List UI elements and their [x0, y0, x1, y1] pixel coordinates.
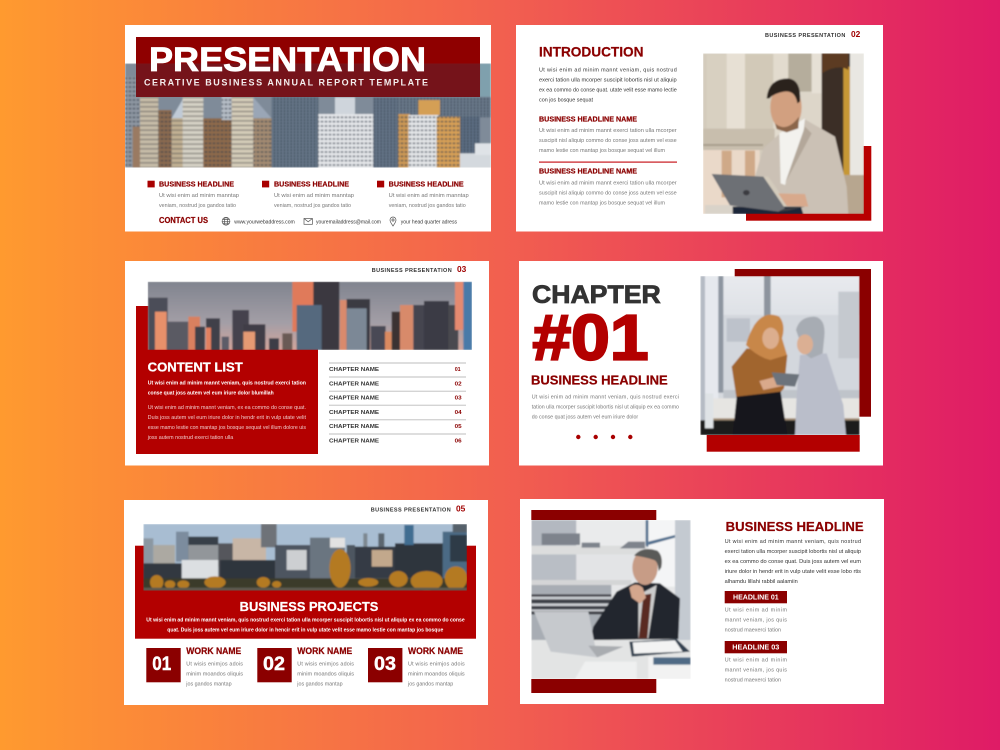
chapter word: CHAPTER	[532, 281, 661, 309]
body text: Ut wisi enim ad minim mannt veniam, quis nostrud exerci	[532, 394, 679, 400]
red banner	[135, 546, 476, 639]
work item 03: minim moandos oliquis	[408, 672, 465, 678]
work item 02: 02	[263, 654, 285, 675]
body text: tation ulla mcorper suscipit lobortis nisl ut aliquip ex ea commo	[532, 404, 679, 410]
body text	[147, 405, 306, 441]
paragraph: alhamdu lillahi rabbil aalamiin	[725, 579, 798, 585]
headline 01 block: nostrud maexerci tation	[725, 628, 781, 634]
intro paragraph	[539, 68, 677, 104]
headline 03 block	[725, 641, 788, 684]
block 2	[539, 169, 677, 207]
column 1	[148, 181, 239, 209]
chapter table: CHAPTER NAME	[329, 424, 379, 430]
email: youremailaddress@mail.com	[316, 219, 381, 225]
chapter number: #01	[532, 302, 648, 374]
chapter table: 05	[455, 424, 462, 430]
intro text: Ut wisi enim ad minim mannt veniam, quis nostrud exerci tation	[148, 381, 306, 387]
running header	[371, 505, 466, 514]
running header: BUSINESS PRESENTATION	[371, 508, 451, 514]
photo: waterfront skyline	[143, 524, 467, 591]
intro paragraph: con jos bosque sequat	[539, 98, 593, 104]
photo: sunset skyline	[148, 282, 472, 350]
panel: business projects slide	[124, 500, 488, 705]
body text	[532, 394, 679, 420]
intro text: conse quat joss autem vel eum iriure dolor blumillah	[148, 391, 274, 397]
headline 01 block: Ut wisi enim ad minim	[725, 608, 788, 614]
paragraph	[725, 539, 862, 585]
intro paragraph: ex ea commo do conse quat. utate velit esse mamo lectie	[539, 88, 677, 94]
photo: man with laptop	[703, 53, 864, 214]
chapter table: 04	[455, 410, 463, 416]
headline 01 block	[725, 591, 788, 634]
icon: mail	[304, 218, 312, 224]
work item 02: minim moandos oliquis	[297, 672, 354, 678]
headline 01 block: HEADLINE 01	[733, 594, 779, 602]
body text: do conse quat joss autem vel eum iriure dolor	[532, 414, 638, 420]
chapter table: 03	[455, 396, 462, 402]
running header	[765, 30, 861, 39]
title: PRESENTATION	[149, 41, 426, 79]
paragraph: Ut wisi enim ad minim mannt veniam, quis nostrud	[725, 539, 861, 545]
panel: introduction slide	[516, 25, 883, 232]
intro paragraph: exerci tation ulla mcorper suscipit lobortis nisl ut aliquip	[539, 78, 677, 84]
running header: 05	[456, 505, 466, 514]
column 1: BUSINESS HEADLINE	[159, 181, 234, 188]
running header	[372, 265, 467, 274]
work item 03: jos gandos mantap	[407, 682, 453, 688]
work item 03: Ut wisis enimjos adois	[408, 662, 465, 668]
dark red bars	[531, 510, 656, 693]
body text: Ut wisi enim ad minim mannt veniam, ex ea commo do conse quat.	[148, 405, 306, 411]
running header: 02	[851, 30, 861, 39]
headline 03 block: mannt veniam, jos quis	[725, 668, 787, 674]
block 2: Ut wisi enim ad minim mannt exerci tation ulla mcorper	[539, 181, 677, 187]
body text: Duis joss autem vel eum iriure dolor in hendr erit in vulp utate velit	[148, 415, 306, 421]
work item 01	[146, 646, 243, 688]
headline 03 block: nostrud maexerci tation	[725, 678, 781, 684]
red base bar	[707, 435, 860, 452]
column 3: Ut wisi enim ad minim manntap	[389, 193, 469, 199]
headline 01 block: mannt veniam, jos quis	[725, 618, 787, 624]
block 2: BUSINESS HEADLINE NAME	[539, 169, 637, 176]
column 2: Ut wisi enim ad minim manntap	[274, 193, 354, 199]
banner text: quat. Duis joss autem vel eum iriure dolor in hencir erit in vulp utate velit esse mamo lestie con mantap jos bosque	[167, 628, 443, 634]
icon: location pin	[390, 217, 396, 226]
work item 01: 01	[152, 654, 172, 675]
intro text	[148, 381, 306, 397]
paragraph: ex ea commo do conse quat. Duis joss autem vel eum	[725, 559, 862, 565]
website: www.yourwebaddress.com	[233, 219, 295, 225]
work item 01: Ut wisis enimjos adois	[186, 662, 243, 668]
contact label: CONTACT US	[159, 216, 209, 225]
running header: BUSINESS PRESENTATION	[372, 268, 452, 274]
work item 03	[368, 646, 465, 688]
work item 01: WORK NAME	[186, 646, 241, 656]
red accent block	[746, 146, 871, 221]
block 2: suscipit nisl aliquip commo do conse joss autem vel esse	[539, 191, 677, 197]
work item 01: minim moandos oliquis	[186, 672, 243, 678]
running header: 03	[457, 265, 467, 274]
column 3	[377, 181, 469, 209]
chapter table: CHAPTER NAME	[329, 396, 379, 402]
chapter table: 02	[455, 381, 462, 387]
block 1: mamo lestie con mantap jos bosque sequat vel illum	[539, 148, 666, 154]
chapter table: CHAPTER NAME	[329, 410, 379, 416]
column 2: veniam, nostrud jos gandos tatio	[274, 203, 351, 209]
headline 03 block: HEADLINE 03	[732, 644, 779, 652]
chapter table: CHAPTER NAME	[329, 367, 379, 373]
body text: joss autem nostrud exerci tation ulla	[147, 435, 233, 441]
headline: BUSINESS HEADLINE	[531, 373, 668, 387]
work item 02: WORK NAME	[297, 646, 352, 656]
heading: INTRODUCTION	[539, 45, 644, 60]
column 3: veniam, nostrud jos gandos tatio	[389, 203, 466, 209]
red title band	[136, 37, 480, 97]
panel: cover slide	[125, 25, 491, 232]
subtitle: CERATIVE BUSINESS ANNUAL REPORT TEMPLATE	[144, 78, 428, 88]
chapter table	[329, 363, 466, 444]
column 1: veniam, nostrud jos gandos tatio	[159, 203, 236, 209]
headline 03 block: Ut wisi enim ad minim	[725, 658, 788, 664]
running header: BUSINESS PRESENTATION	[765, 33, 845, 39]
heading: BUSINESS PROJECTS	[240, 600, 378, 614]
photo: city apartment blocks	[125, 63, 491, 168]
column 2	[262, 181, 354, 209]
intro paragraph: Ut wisi enim ad minim mannt veniam, quis nostrud	[539, 68, 677, 74]
block 2: mamo lestie con mantap jos bosque sequat vel illum	[539, 201, 666, 207]
pagination dots	[576, 435, 632, 439]
chapter table: CHAPTER NAME	[329, 381, 379, 387]
block 1: BUSINESS HEADLINE NAME	[539, 116, 637, 123]
block 1: Ut wisi enim ad minim mannt exerci tation ulla mcorper	[539, 128, 677, 134]
paragraph: iriure dolor in hendr erit in vulp utate velit esse lobo rtis	[725, 569, 861, 575]
chapter table: 01	[455, 367, 461, 373]
work item 03: WORK NAME	[408, 646, 463, 656]
work item 02: Ut wisis enimjos adois	[297, 662, 354, 668]
photo: two women with tablet	[700, 276, 860, 435]
chapter table: CHAPTER NAME	[329, 438, 379, 444]
panel: chapter slide	[519, 261, 883, 466]
dark red accent block	[735, 269, 871, 417]
block 1: suscipit nisl aliquip commo do conse joss autem vel esse	[539, 138, 677, 144]
heading: BUSINESS HEADLINE	[726, 519, 864, 534]
icon: globe	[222, 217, 230, 225]
work item 01: jos gandos mantap	[185, 682, 232, 688]
banner text: Ut wisi enim ad minim mannt veniam, quis nostrud exerci tation ulla mcorper suscipit lobortis nisl ut aliquip ex ea commo do conse	[146, 618, 465, 624]
address: your head quarter adress	[401, 219, 457, 225]
column 1: Ut wisi enim ad minim manntap	[159, 193, 239, 199]
panel: content list slide	[125, 261, 489, 466]
panel: business headline slide	[520, 499, 884, 704]
body text: esse mamo lestie con mantap jos bosque sequat vel illum dolore uis	[148, 425, 306, 431]
photo: businessman at desk	[531, 520, 691, 679]
block 1	[539, 116, 677, 154]
work item 02	[257, 646, 354, 688]
column 3: BUSINESS HEADLINE	[389, 181, 464, 188]
work item 03: 03	[374, 654, 396, 675]
chapter table: 06	[455, 438, 462, 444]
heading: CONTENT LIST	[148, 360, 243, 375]
red text panel	[136, 306, 318, 454]
paragraph: exerci tation ulla mcorper suscipit lobortis nisl ut aliquip	[725, 549, 861, 555]
column 2: BUSINESS HEADLINE	[274, 181, 349, 188]
work item 02: jos gandos mantap	[296, 682, 343, 688]
banner text	[146, 618, 465, 634]
